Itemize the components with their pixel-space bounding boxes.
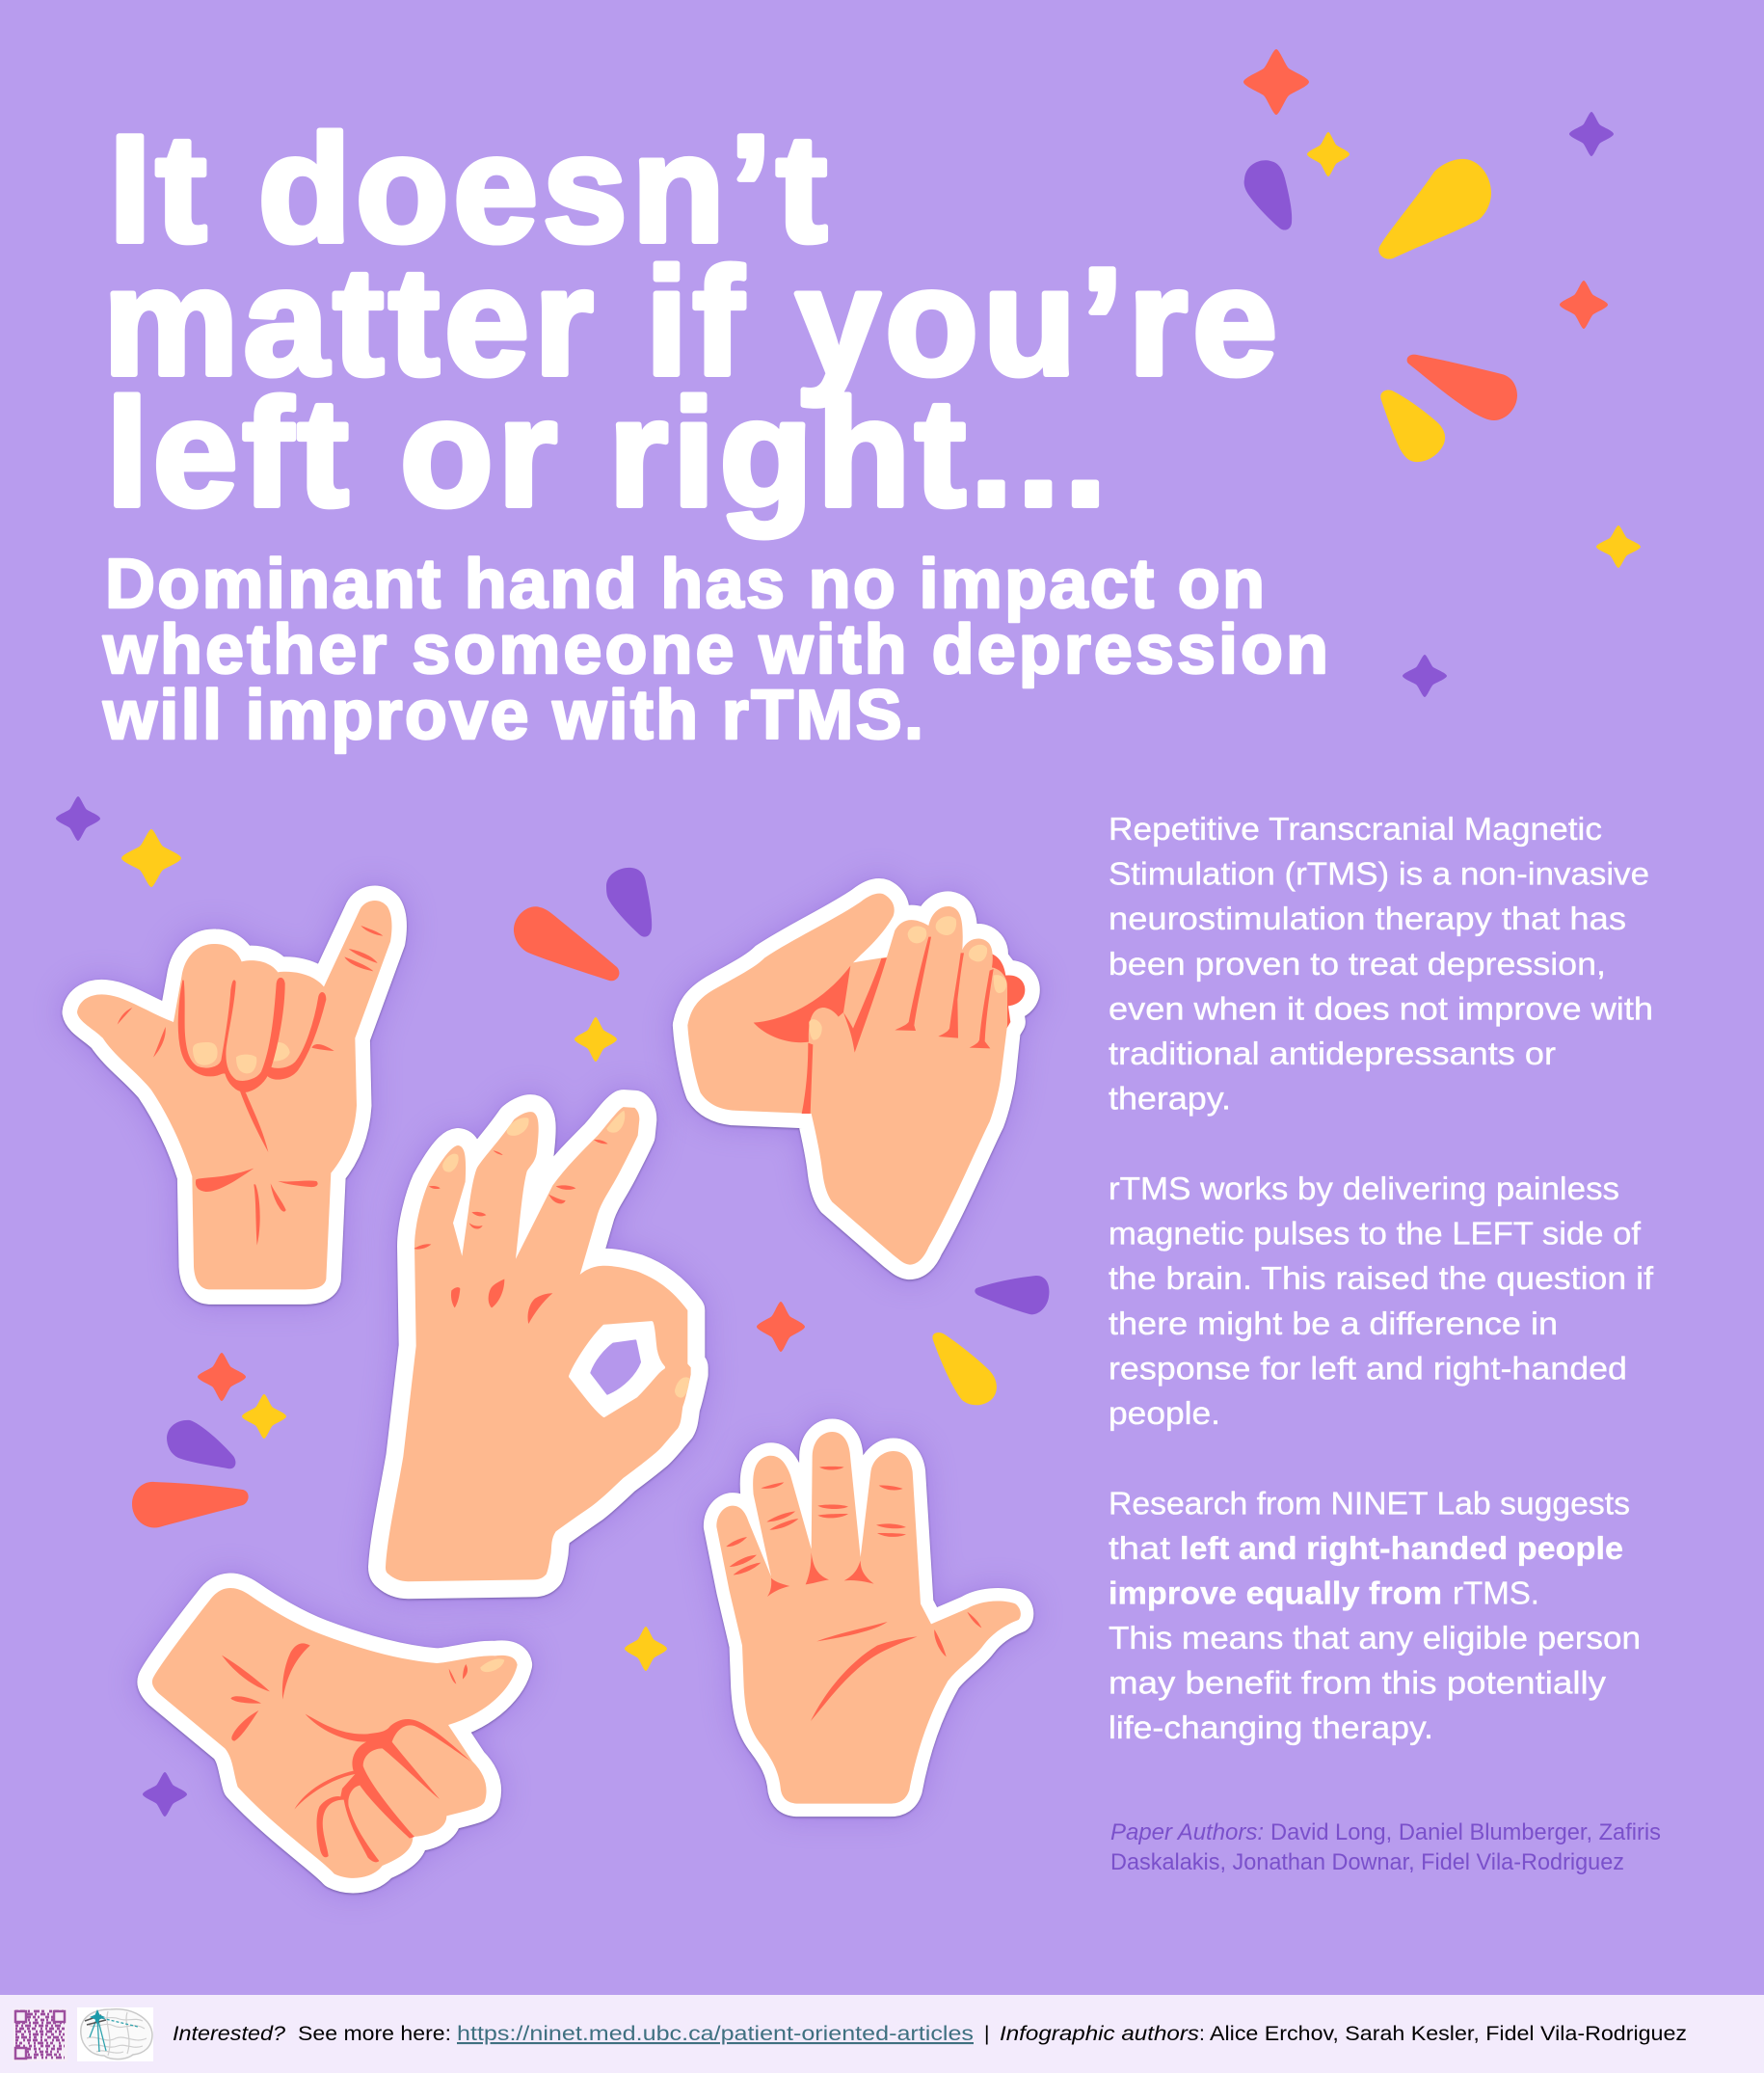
- text block: research finding: rTMS.: [1453, 1575, 1539, 1611]
- text block: research finding: improve equally from: [1109, 1575, 1442, 1611]
- text block: what is rTMS: Stimulation (rTMS) is a non-invasive: [1109, 856, 1649, 892]
- paper authors: Paper Authors:: [1110, 1819, 1264, 1845]
- text block: what is rTMS: [1109, 811, 1653, 1117]
- footer text: https://ninet.med.ubc.ca/patient-oriented-articles: [457, 2023, 974, 2045]
- paper authors: David Long, Daniel Blumberger, Zafiris: [1270, 1819, 1661, 1845]
- text block: research finding: may benefit from this potentially: [1109, 1664, 1607, 1701]
- footer text: Interested?: [173, 2023, 285, 2045]
- hand: shaka sign: [77, 901, 391, 1289]
- paper authors: Daskalakis, Jonathan Downar, Fidel Vila-Rodriguez: [1110, 1849, 1624, 1875]
- subtitle: [102, 546, 1328, 754]
- footer text: [173, 2023, 1687, 2045]
- text block: research finding: left and right-handed people: [1180, 1530, 1623, 1566]
- footer text: Alice Erchov, Sarah Kesler, Fidel Vila-Rodriguez: [1210, 2023, 1687, 2045]
- text block: how rTMS works: there might be a difference in: [1109, 1306, 1558, 1341]
- subtitle: whether someone with depression: [102, 611, 1328, 688]
- footer text: :: [1199, 2023, 1205, 2045]
- text block: research finding: This means that any eligible person: [1109, 1620, 1641, 1656]
- text block: what is rTMS: therapy.: [1109, 1081, 1231, 1117]
- text block: how rTMS works: response for left and right-handed: [1109, 1350, 1627, 1386]
- hand: clasped hands: [687, 894, 1025, 1265]
- title: left or right...: [106, 368, 1107, 538]
- text block: what is rTMS: been proven to treat depression,: [1109, 946, 1606, 982]
- text block: how rTMS works: people.: [1109, 1395, 1220, 1431]
- text block: how rTMS works: the brain. This raised the question if: [1109, 1260, 1654, 1296]
- text block: how rTMS works: [1109, 1171, 1654, 1431]
- icon: brain network: [77, 2007, 153, 2061]
- title: It doesn’t: [109, 104, 827, 274]
- text block: research finding: life-changing therapy.: [1109, 1710, 1433, 1745]
- decoration: stars and drops around the hands: [56, 796, 1049, 1817]
- icon: QR code: [13, 2008, 67, 2061]
- hand: OK sign: [386, 1107, 691, 1581]
- text block: how rTMS works: magnetic pulses to the LEFT side of: [1109, 1216, 1642, 1252]
- subtitle: will improve with rTMS.: [102, 677, 923, 754]
- text block: what is rTMS: even when it does not improve with: [1109, 990, 1653, 1026]
- footer band: [0, 1995, 1764, 2073]
- hand: open palm: [716, 1432, 1021, 1804]
- text block: research finding: Research from NINET Lab suggests: [1109, 1486, 1630, 1521]
- footer text: |: [984, 2023, 989, 2045]
- subtitle: Dominant hand has no impact on: [105, 546, 1265, 623]
- text block: how rTMS works: rTMS works by delivering painless: [1109, 1171, 1619, 1206]
- paper authors: [1110, 1819, 1661, 1875]
- text block: what is rTMS: Repetitive Transcranial Magnetic: [1109, 811, 1602, 847]
- text block: what is rTMS: traditional antidepressants or: [1109, 1036, 1556, 1071]
- text block: what is rTMS: neurostimulation therapy that has: [1109, 901, 1626, 936]
- title: matter if you’re: [103, 237, 1277, 407]
- decoration: top right burst: [1243, 49, 1641, 697]
- footer text: See more here:: [298, 2023, 451, 2045]
- text block: research finding: that: [1109, 1530, 1170, 1566]
- hand: thumbs sideways fist: [152, 1588, 518, 1878]
- footer text: Infographic authors: [1000, 2023, 1200, 2045]
- text block: research finding: [1109, 1486, 1641, 1745]
- title: [103, 104, 1277, 538]
